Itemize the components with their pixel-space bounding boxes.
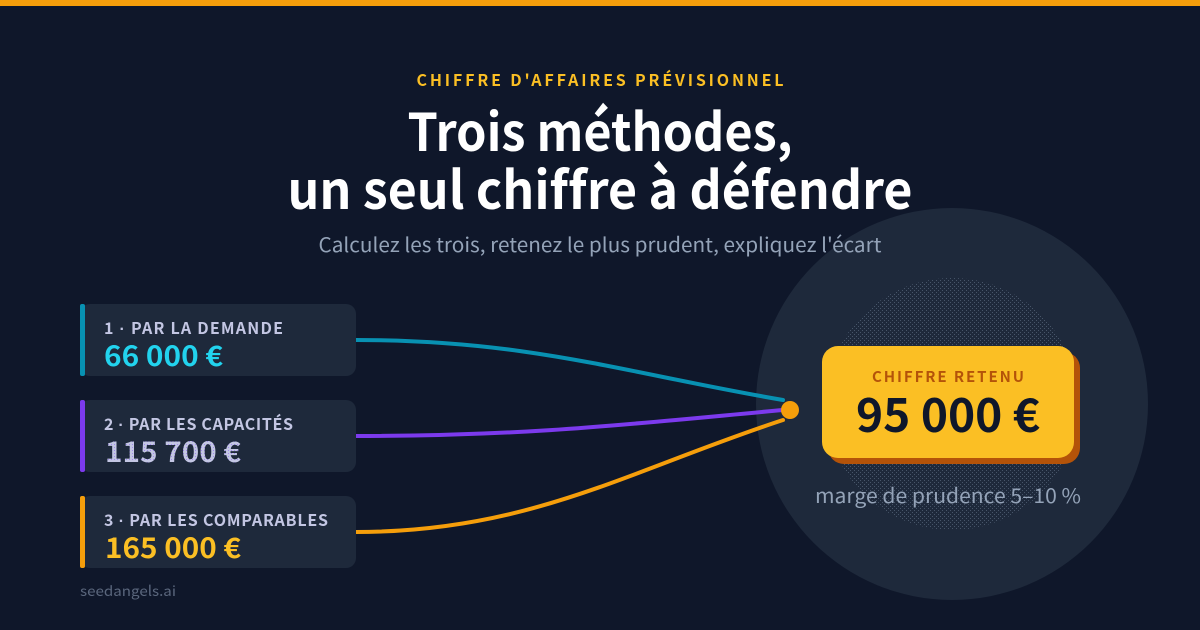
method card 2: 2 · PAR LES CAPACITÉS [104,411,293,435]
result card [822,346,1080,464]
dotted inner circle [826,278,1078,530]
subtitle: Calculez les trois, retenez le plus prudent, expliquez l'écart [318,229,882,258]
method card 1: 66 000 € [104,335,223,375]
method card 2 [80,400,356,472]
title [288,91,912,224]
method card 1: 1 · PAR LA DEMANDE [104,315,283,339]
method card 3: 3 · PAR LES COMPARABLES [104,507,328,531]
convergence dot [781,401,799,419]
title: un seul chiffre à défendre [288,149,912,224]
method card 3 [80,496,356,568]
title: Trois méthodes, [408,91,792,166]
method card 3: 165 000 € [105,527,242,567]
source credit: seedangels.ai [80,581,176,601]
result card: CHIFFRE RETENU [872,366,1024,387]
connector curves [356,340,783,532]
margin note: marge de prudence 5–10 % [815,480,1081,509]
top accent bar [0,0,1200,6]
background circle [756,208,1148,600]
method card 2: 115 700 € [105,431,242,471]
method card 1 [80,304,356,376]
result card: 95 000 € [856,380,1040,446]
eyebrow heading: CHIFFRE D'AFFAIRES PRÉVISIONNEL [416,67,784,91]
